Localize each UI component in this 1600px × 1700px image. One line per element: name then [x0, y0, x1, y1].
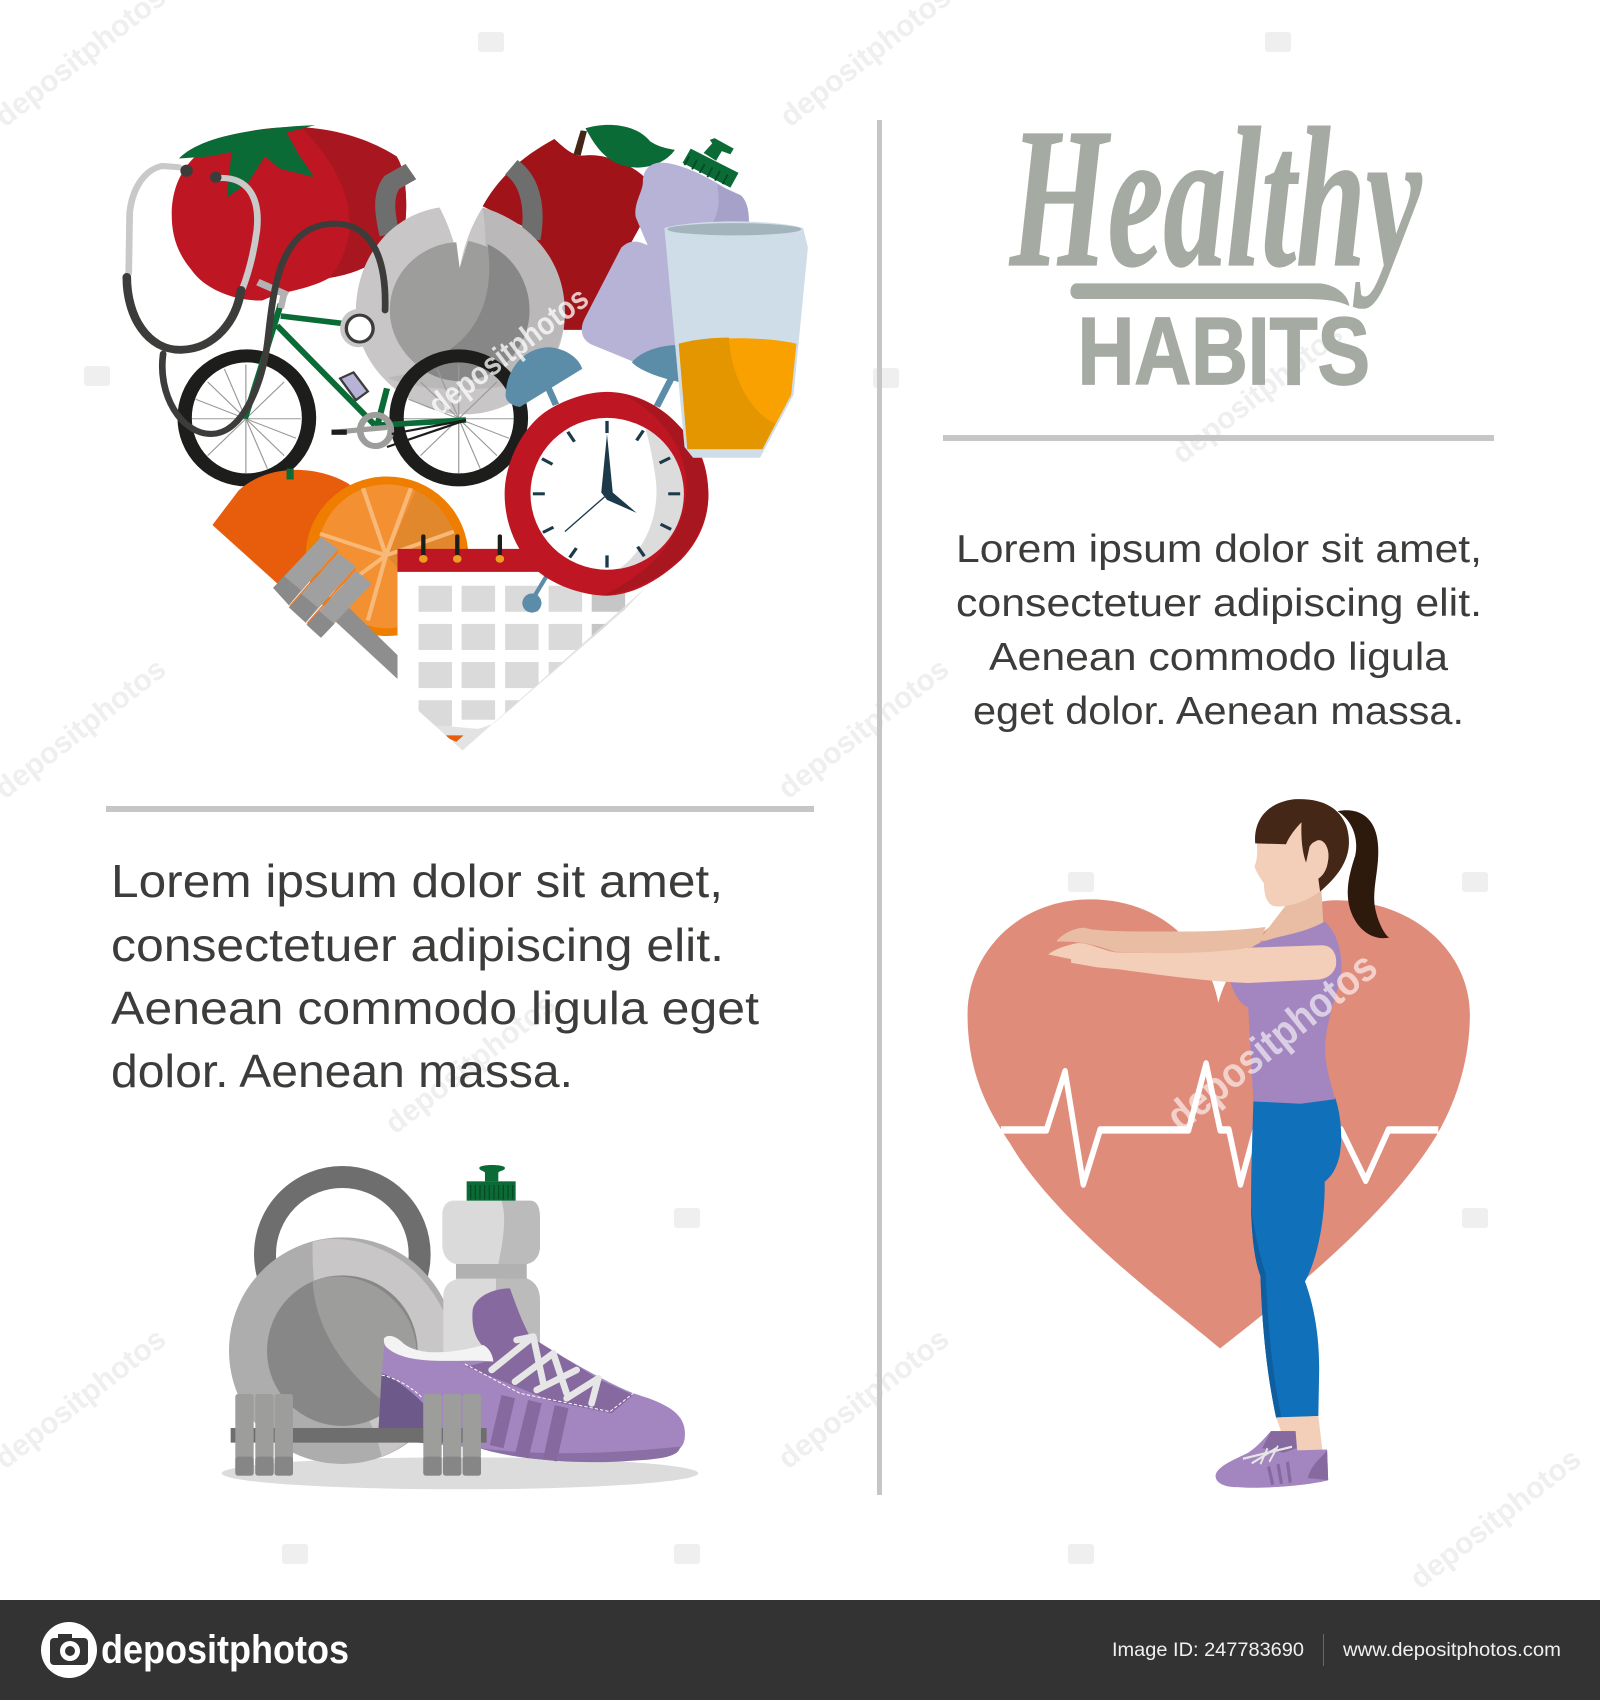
icon: sports bottle [442, 1165, 540, 1407]
background watermark: depositphotos [772, 652, 955, 806]
illustration: kettlebell, bottle, shoe and dumbbell [222, 1165, 698, 1489]
ponytail [1338, 810, 1389, 938]
footer brand name: depositphotos [101, 1628, 349, 1672]
icon: dumbbell [273, 537, 398, 679]
icon: stethoscope [127, 165, 385, 434]
icon: orange [212, 469, 468, 636]
icon: alarm clock [505, 345, 708, 613]
shoe [1216, 1431, 1328, 1488]
background watermark: depositphotos [379, 987, 562, 1141]
icon: kettlebell [356, 208, 565, 414]
neck [1259, 886, 1323, 941]
text block: right column: consectetuer adipiscing elit. [956, 582, 1482, 625]
text block: left column: Lorem ipsum dolor sit amet, [111, 855, 723, 907]
heart collage of health icons [127, 125, 808, 751]
figure: woman [1048, 799, 1389, 1488]
watermark on figure: depositphotos [1157, 942, 1386, 1140]
top [1231, 921, 1341, 1104]
back arm [1057, 927, 1266, 955]
vertical divider [877, 120, 882, 1495]
word HABITS: HABITS [1078, 299, 1370, 405]
image id: Image ID: 247783690 [1112, 1639, 1304, 1661]
text block: right column: Aenean commodo ligula [989, 636, 1449, 679]
background watermark: depositphotos [1404, 1442, 1587, 1596]
illustration: woman exercising over heart [968, 799, 1470, 1488]
text block: left column: Aenean commodo ligula eget [111, 982, 759, 1034]
ear [1310, 840, 1329, 871]
footer separator [1323, 1634, 1324, 1666]
hair [1255, 799, 1349, 892]
right heading divider [943, 435, 1494, 441]
floor shadow [222, 1457, 698, 1489]
head [1254, 821, 1329, 906]
text block: left column: consectetuer adipiscing elit. [111, 919, 724, 971]
footer logo icon [41, 1622, 97, 1678]
footer bar [0, 1600, 1600, 1700]
icon: dumbbell [231, 1394, 487, 1476]
icon: glass of juice [664, 221, 808, 458]
watermark on collage: depositphotos [422, 279, 595, 423]
front arm [1048, 943, 1336, 983]
text block: left column: dolor. Aenean massa. [111, 1045, 573, 1097]
icon: pink heart with pulse [968, 899, 1470, 1348]
icon: bicycle [185, 282, 521, 480]
leggings [1251, 1098, 1341, 1418]
icon: tomato [172, 125, 406, 300]
text block: right column [956, 528, 1482, 733]
logo: Healthy Habits heading [1009, 88, 1422, 405]
clock bells [506, 345, 679, 613]
icon: purple sneaker [378, 1288, 685, 1462]
icon: calendar [398, 536, 646, 751]
underline swash [1070, 283, 1349, 306]
website url: www.depositphotos.com [1342, 1639, 1561, 1661]
text block: right column: Lorem ipsum dolor sit amet, [956, 528, 1482, 571]
bicycle spokes [191, 365, 514, 473]
background watermark: depositphotos [772, 1322, 955, 1476]
icon: water bottle [582, 138, 749, 365]
lower leg [1276, 1416, 1323, 1453]
icon: kettlebell handle behind [385, 167, 533, 239]
icon: apple [483, 125, 675, 330]
leggings shade [1251, 1207, 1282, 1418]
icon: kettlebell [229, 1177, 456, 1464]
background watermark: depositphotos [1166, 317, 1349, 471]
text block: right column: eget dolor. Aenean massa. [973, 690, 1464, 733]
text block: left column [111, 855, 759, 1097]
left text divider [106, 806, 814, 812]
